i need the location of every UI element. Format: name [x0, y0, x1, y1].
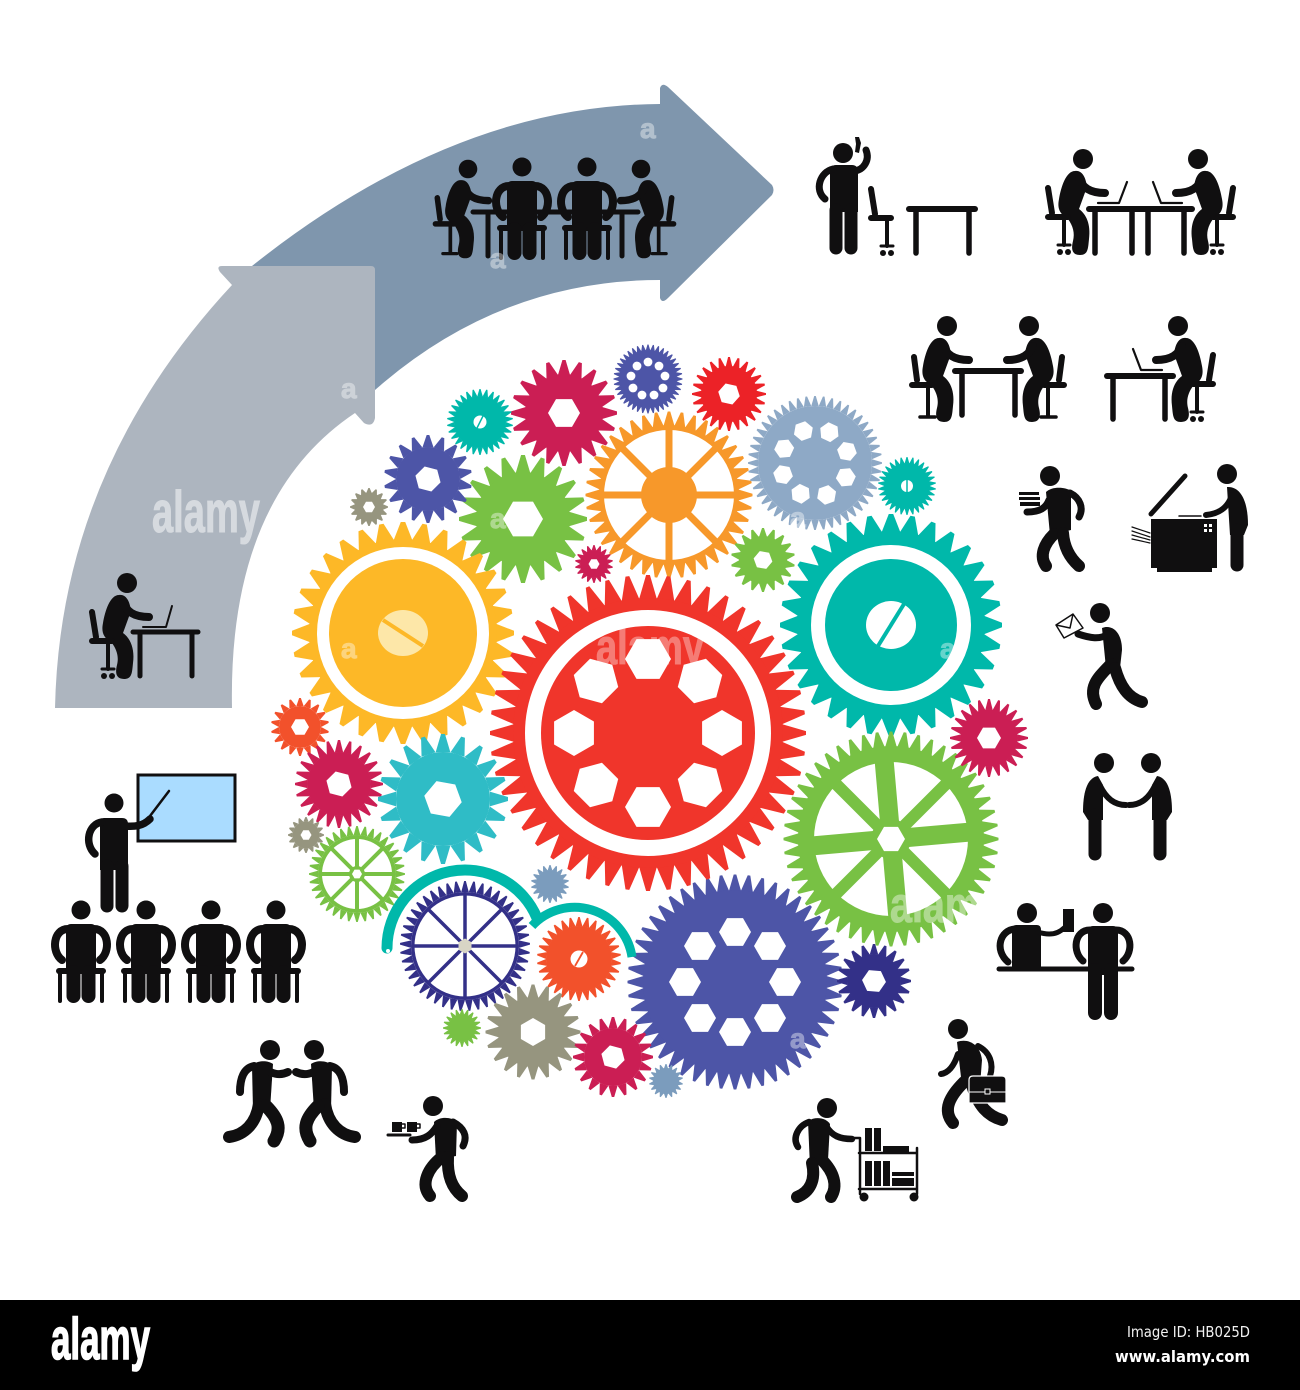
gear: orange-red lower: [523, 909, 631, 1016]
icon: reception desk exchange: [999, 903, 1132, 1013]
icon: person delivering an envelope: [1056, 603, 1142, 704]
icon: person pushing a file cart: [796, 1098, 918, 1202]
gear: tiny magenta: [567, 543, 614, 591]
icon: two colleagues at laptops: [1048, 149, 1233, 255]
footer band: [0, 1300, 1300, 1390]
icon: person walking with briefcase: [941, 1019, 1006, 1123]
icon: person working at a laptop: [1107, 316, 1213, 422]
gear: large green spoked wheel: [728, 688, 1031, 1014]
watermark: small letter marks: a: [790, 1023, 806, 1054]
icon: person carrying a stack of paper: [1019, 466, 1081, 566]
gear: small green right: [718, 525, 797, 606]
icon: team meeting on second arrow: [435, 158, 674, 258]
gear: small blue with dots: [600, 335, 692, 427]
watermark: small letter marks: a: [640, 113, 656, 144]
gear cluster: [259, 335, 1038, 1157]
gear: small teal right: [868, 451, 943, 525]
gear: small green spoked wheel: [289, 818, 409, 943]
watermark: small letter marks: a: [490, 243, 506, 274]
icon: two colleagues bumping fists: [229, 1040, 355, 1141]
icon: person at photocopier: [1132, 464, 1248, 572]
icon: seated audience of four: [55, 900, 302, 1001]
gear: tiny steel blue lower: [642, 1062, 684, 1105]
watermark: small letter marks: a: [341, 373, 357, 404]
icon: presenter at whiteboard: [89, 775, 235, 906]
gear: small red top: [674, 344, 776, 453]
watermark: alamy on arrow: alamy: [152, 480, 260, 545]
gear: orange-red small left: [259, 695, 331, 768]
watermark: small letter marks: a: [790, 502, 806, 533]
arrow: first stage (light grey): [55, 266, 375, 708]
arc: teal guard over navy and orange gears: [386, 870, 632, 957]
watermark: small letter marks: a: [490, 503, 506, 534]
watermark: small letter marks: [341, 113, 956, 1054]
gear: large teal: [762, 496, 1020, 754]
gear: small teal top: [436, 382, 521, 467]
arrow: second stage (blue-grey): [252, 85, 774, 420]
watermark: small letter marks: a: [341, 633, 357, 664]
gear: grey lower: [470, 976, 592, 1096]
gear: tiny grey upper: [349, 487, 389, 527]
footer: image id: Image ID: HB025D: [1127, 1323, 1250, 1341]
gear: green medium: [438, 443, 602, 606]
icon: two people talking at a table: [912, 316, 1064, 422]
gear: tiny green: [437, 1005, 485, 1054]
gear: magenta top: [493, 350, 630, 485]
gear: navy spoked wheel: [376, 866, 546, 1035]
watermark: small letter marks: a: [940, 633, 956, 664]
footer: alamy logo: alamy: [51, 1307, 150, 1372]
gear: orange spoked wheel: [552, 389, 774, 612]
gear: magenta left: [273, 725, 395, 854]
icon: person on phone beside empty desk: [819, 137, 975, 256]
watermark: alamy on green gear: alam: [890, 877, 980, 933]
gear: cyan: [356, 722, 523, 887]
watermark: alamy on red gear: alamy: [596, 619, 704, 675]
gear: tiny steel blue: [523, 863, 570, 911]
gear: magenta lower: [560, 1009, 662, 1111]
icon: worker at laptop on first arrow: [92, 573, 198, 679]
gear: magenta right: [931, 686, 1038, 800]
gear: blue upper left: [366, 431, 475, 542]
gear: tiny grey left: [287, 816, 325, 854]
gear: navy right: [825, 937, 920, 1031]
footer: website: www.alamy.com: [1115, 1347, 1250, 1366]
icon: two people shaking hands: [1083, 753, 1172, 854]
gear: steel blue with holes: [713, 369, 902, 572]
gear: large blue with holes: [572, 831, 875, 1157]
gear: central red with holes: [408, 511, 854, 991]
gear: large yellow: [274, 504, 532, 762]
icon: waiter carrying coffee tray: [388, 1096, 465, 1196]
